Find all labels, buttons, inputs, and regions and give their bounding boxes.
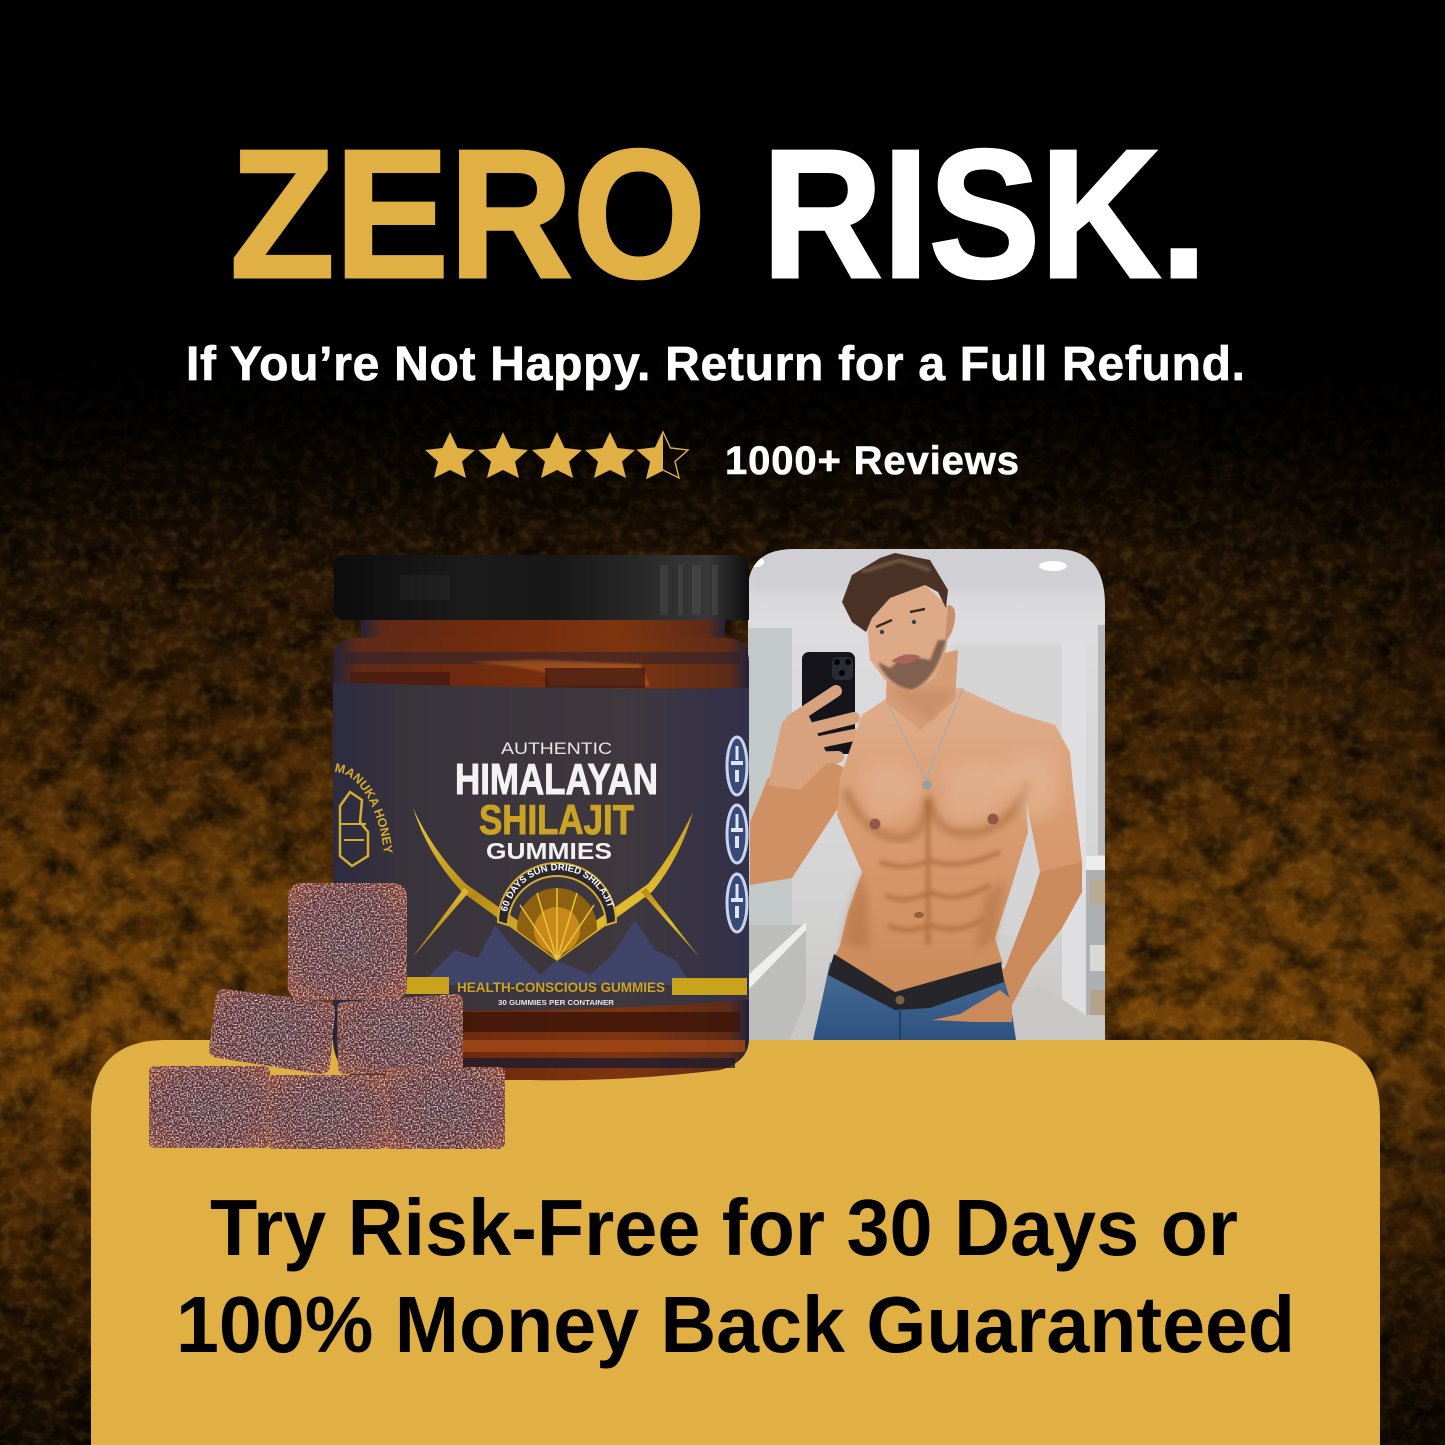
forearm and hand in pocket <box>1002 862 1082 1005</box>
phone <box>802 652 855 754</box>
gold label bands <box>403 977 747 995</box>
gummy: bottom middle <box>268 1075 386 1149</box>
jar lid <box>334 555 749 620</box>
raised arm <box>750 760 848 885</box>
gold v emblem <box>413 808 693 961</box>
title: zero risk: RISK. <box>762 111 1207 316</box>
label text: gummies: GUMMIES <box>486 838 612 864</box>
label text: shilajit: SHILAJIT <box>479 796 634 843</box>
sun badge <box>497 862 617 960</box>
head and neck <box>842 553 958 730</box>
jar label <box>333 682 749 1011</box>
jar neck <box>360 618 726 640</box>
mountains <box>420 920 692 985</box>
label text: container count: 30 GUMMIES PER CONTAINER <box>498 1000 614 1007</box>
muscle shading <box>842 752 1060 950</box>
sun badge: 60 DAYS SUN DRIED SHILAJIT <box>501 864 614 912</box>
gummy: bottom right <box>385 1067 505 1149</box>
guarantee text: Try Risk-Free for 30 Days or <box>210 1183 1238 1272</box>
product: shilajit gummies jar <box>333 555 749 1080</box>
gummy: middle right <box>337 994 463 1074</box>
label text: authentic: AUTHENTIC <box>501 739 612 758</box>
certification badges <box>727 737 747 932</box>
belt and jeans <box>813 954 1016 1040</box>
star rating <box>425 432 688 478</box>
subtitle: If You’re Not Happy. Return for a Full Refund. <box>186 338 1245 391</box>
guarantee text: 100% Money Back Guaranteed <box>176 1280 1295 1369</box>
title: zero risk <box>230 111 1207 316</box>
label text: health-conscious gummies: HEALTH-CONSCIOUS GUMMIES <box>457 979 665 995</box>
hand <box>768 691 854 790</box>
gold guarantee panel <box>91 1040 1380 1445</box>
photo: man taking a mirror selfie <box>748 549 1105 1040</box>
glass reflections <box>345 652 745 1068</box>
bathroom background <box>748 549 1105 1040</box>
gummy: top <box>288 883 407 1000</box>
manuka honey seal: MANUKA HONEY <box>335 763 393 853</box>
jar glass body <box>333 638 749 1080</box>
torso and arms <box>750 688 1082 1018</box>
gummy: middle left <box>209 989 335 1074</box>
gummy: bottom left <box>149 1066 270 1148</box>
guarantee text <box>176 1183 1295 1369</box>
label text: himalayan: HIMALAYAN <box>455 755 658 804</box>
torso and shoulder <box>834 688 1082 994</box>
reviews count: 1000+ Reviews <box>725 439 1019 483</box>
title: zero risk: ZERO <box>230 111 706 316</box>
necklace <box>886 688 963 790</box>
gummies pile <box>149 883 505 1149</box>
